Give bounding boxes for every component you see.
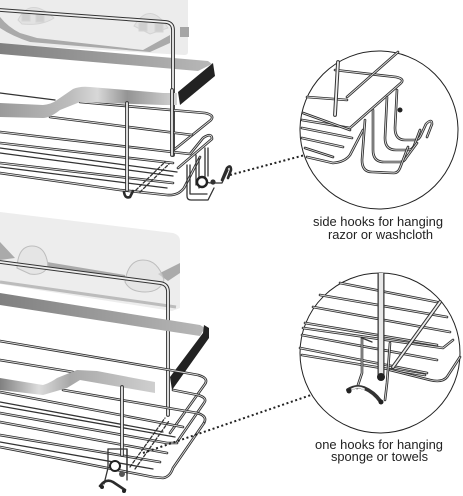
caption: side hooks: razor or washcloth — [328, 228, 433, 242]
plate end tab — [180, 27, 189, 37]
rail end — [178, 63, 215, 105]
adhesive plate — [0, 212, 180, 311]
zoomed hooks — [362, 90, 432, 173]
upper flat rail — [0, 293, 205, 336]
top rod — [0, 10, 173, 155]
plate shadow band — [0, 17, 170, 52]
dotted leader: top — [230, 155, 305, 175]
top shower basket — [0, 0, 231, 200]
caption: one hook: one hooks for hanging — [315, 438, 443, 452]
rod over band — [170, 90, 174, 155]
rail end — [170, 325, 209, 390]
detail circle: side hooks — [300, 51, 458, 209]
suction cups — [17, 246, 164, 292]
side hooks — [187, 148, 231, 200]
front wavy band — [0, 87, 177, 118]
front leg — [120, 387, 124, 455]
zoomed wires — [302, 52, 402, 163]
caption: side hooks — [313, 215, 443, 242]
zoomed hook — [346, 338, 390, 404]
caption: one hook — [315, 438, 443, 464]
suction cups — [18, 7, 168, 34]
hook screw — [197, 177, 207, 187]
basket wires — [0, 93, 212, 195]
caption: side hooks: side hooks for hanging — [313, 215, 443, 229]
caption: one hook: sponge or towels — [331, 450, 428, 464]
dotted leader: bottom — [143, 395, 311, 453]
zoomed wires — [300, 283, 460, 381]
bottom shower basket — [0, 212, 209, 493]
top rod — [0, 262, 168, 415]
plate shadow bands — [0, 242, 180, 281]
front hook — [100, 449, 127, 493]
upper flat rail — [0, 43, 212, 71]
adhesive plate — [0, 0, 188, 55]
basket wires — [0, 341, 206, 478]
front wavy band — [0, 370, 155, 395]
detail circle: one hook — [300, 273, 460, 433]
zoomed post — [378, 273, 384, 375]
front leg — [124, 103, 133, 197]
